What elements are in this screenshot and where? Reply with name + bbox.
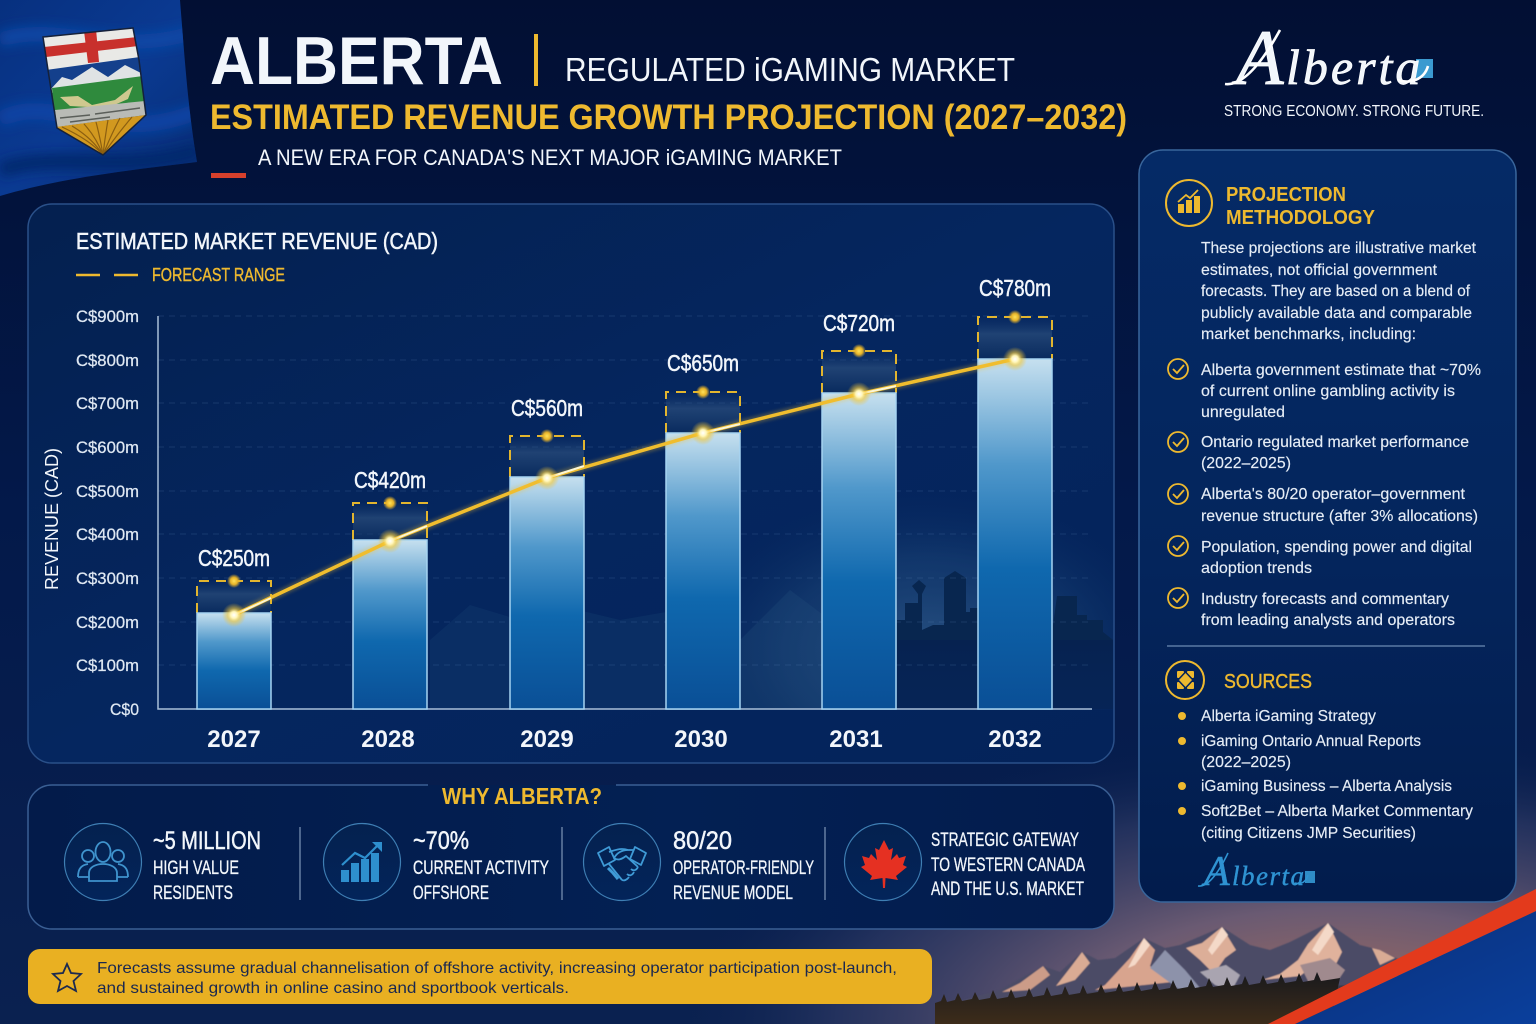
stat: strategic gateway [844, 824, 1085, 900]
methodology checklist: unregulated [1201, 404, 1285, 421]
icon: star [53, 964, 81, 991]
trend line [222, 310, 1027, 627]
stat: 70 percent offshore: ~70% [413, 827, 469, 855]
stat: strategic gateway: AND THE U.S. MARKET [931, 879, 1084, 900]
heading: projection methodology: PROJECTION [1226, 184, 1346, 206]
stat: 5 million residents: ~5 MILLION [153, 827, 261, 855]
axes [158, 316, 1092, 709]
stat: 5 million residents: RESIDENTS [153, 883, 233, 904]
forecast range boxes [197, 317, 1052, 613]
Alberta logo: A [1231, 14, 1284, 101]
stat: 80/20 revenue model: REVENUE MODEL [673, 883, 793, 904]
tagline: A NEW ERA FOR CANADA'S NEXT MAJOR iGAMING MARKET [258, 145, 842, 170]
title: REGULATED iGAMING MARKET [565, 51, 1015, 88]
footer banner [28, 949, 932, 1004]
footer banner: and sustained growth in online casino and sportbook verticals. [97, 980, 569, 997]
grid lines [158, 316, 1092, 665]
sources list: (2022–2025) [1201, 754, 1291, 771]
value labels: C$420m [354, 467, 426, 493]
sources list: Soft2Bet – Alberta Market Commentary [1201, 803, 1473, 820]
Alberta logo [1224, 14, 1484, 120]
subtitle: ESTIMATED REVENUE GROWTH PROJECTION (2027–2032) [210, 98, 1127, 137]
methodology text: estimates, not official government [1201, 262, 1438, 279]
value labels: C$560m [511, 395, 583, 421]
stat: 80/20 revenue model: OPERATOR-FRIENDLY [673, 858, 814, 879]
chart heading: ESTIMATED MARKET REVENUE (CAD) [76, 228, 438, 254]
methodology checklist: Alberta government estimate that ~70% [1201, 362, 1481, 379]
year labels [207, 726, 1042, 753]
Alberta logo: lberta [1286, 39, 1423, 95]
methodology checklist: Alberta's 80/20 operator–government [1201, 486, 1466, 503]
flag with coat of arms [0, 0, 200, 200]
y axis labels: C$400m [76, 525, 139, 544]
tagline [211, 145, 842, 178]
heading: sources [1166, 661, 1312, 699]
y axis labels: C$700m [76, 394, 139, 413]
stat: strategic gateway: STRATEGIC GATEWAY [931, 830, 1079, 851]
stat: 5 million residents: HIGH VALUE [153, 858, 239, 879]
methodology text [1201, 240, 1477, 343]
year labels: 2032 [988, 726, 1042, 753]
methodology checklist: adoption trends [1201, 560, 1312, 577]
stat: 80/20 revenue model: 80/20 [673, 827, 732, 855]
stat: 70 percent offshore [324, 824, 549, 904]
value labels: C$650m [667, 350, 739, 376]
stat: 70 percent offshore: OFFSHORE [413, 883, 489, 904]
corner ribbon [1268, 889, 1536, 1024]
year labels: 2028 [361, 726, 415, 753]
value labels [198, 275, 1051, 571]
skyline and mountains backdrop [430, 470, 1113, 710]
methodology checklist: Population, spending power and digital [1201, 539, 1472, 556]
value labels: C$720m [823, 310, 895, 336]
y axis title: REVENUE (CAD) [42, 448, 62, 590]
small Alberta logo: lberta [1232, 861, 1306, 891]
methodology checklist: Ontario regulated market performance [1201, 434, 1469, 451]
year labels: 2031 [829, 726, 883, 753]
bars [197, 359, 1052, 709]
y axis labels [76, 307, 139, 719]
panel: why Alberta [28, 783, 1114, 929]
panel: estimated market revenue chart [28, 204, 1114, 763]
stat: 70 percent offshore: CURRENT ACTIVITY [413, 858, 549, 879]
y axis labels: C$0 [110, 700, 139, 719]
heading: projection methodology [1166, 180, 1376, 229]
y axis labels: C$800m [76, 351, 139, 370]
sources list: Alberta iGaming Strategy [1201, 708, 1376, 725]
small Alberta logo [1198, 849, 1315, 895]
footer banner: Forecasts assume gradual channelisation of offshore activity, increasing operator participation post-launch, [97, 960, 897, 977]
year labels: 2029 [520, 726, 574, 753]
title: ALBERTA [210, 23, 503, 99]
heading: why Alberta: WHY ALBERTA? [442, 783, 602, 809]
value labels: C$780m [979, 275, 1051, 301]
methodology checklist [1168, 359, 1481, 629]
methodology text: forecasts. They are based on a blend of [1201, 283, 1471, 300]
year labels: 2030 [674, 726, 728, 753]
sources list [1178, 708, 1473, 842]
heading: projection methodology: METHODOLOGY [1226, 207, 1376, 229]
methodology checklist: of current online gambling activity is [1201, 383, 1455, 400]
coat of arms shield [42, 27, 147, 156]
y axis labels: C$500m [76, 482, 139, 501]
sources list: iGaming Ontario Annual Reports [1201, 733, 1421, 750]
methodology checklist: revenue structure (after 3% allocations) [1201, 508, 1478, 525]
methodology checklist: Industry forecasts and commentary [1201, 591, 1449, 608]
methodology text: These projections are illustrative market [1201, 240, 1477, 257]
y axis labels: C$300m [76, 569, 139, 588]
heading: sources: SOURCES [1224, 671, 1312, 693]
legend: forecast range: FORECAST RANGE [152, 265, 285, 285]
forest [935, 972, 1340, 1024]
y axis labels: C$200m [76, 613, 139, 632]
sources list: iGaming Business – Alberta Analysis [1201, 778, 1452, 795]
methodology text: publicly available data and comparable [1201, 305, 1472, 322]
sources list: (citing Citizens JMP Securities) [1201, 825, 1416, 842]
y axis labels: C$100m [76, 656, 139, 675]
mountains at sunset [935, 923, 1400, 1024]
methodology checklist: (2022–2025) [1201, 455, 1291, 472]
panel: projection methodology and sources [1139, 150, 1516, 902]
value labels: C$250m [198, 545, 270, 571]
small Alberta logo: A [1201, 849, 1230, 895]
y axis labels: C$900m [76, 307, 139, 326]
year labels: 2027 [207, 726, 261, 753]
stat: 5 million residents [64, 824, 261, 904]
methodology checklist: from leading analysts and operators [1201, 612, 1455, 629]
stat: strategic gateway: TO WESTERN CANADA [931, 855, 1085, 876]
stat: 80/20 revenue model [584, 824, 814, 904]
title [210, 23, 1015, 99]
y axis labels: C$600m [76, 438, 139, 457]
methodology text: market benchmarks, including: [1201, 326, 1416, 343]
Alberta logo: STRONG ECONOMY. STRONG FUTURE. [1224, 103, 1484, 120]
